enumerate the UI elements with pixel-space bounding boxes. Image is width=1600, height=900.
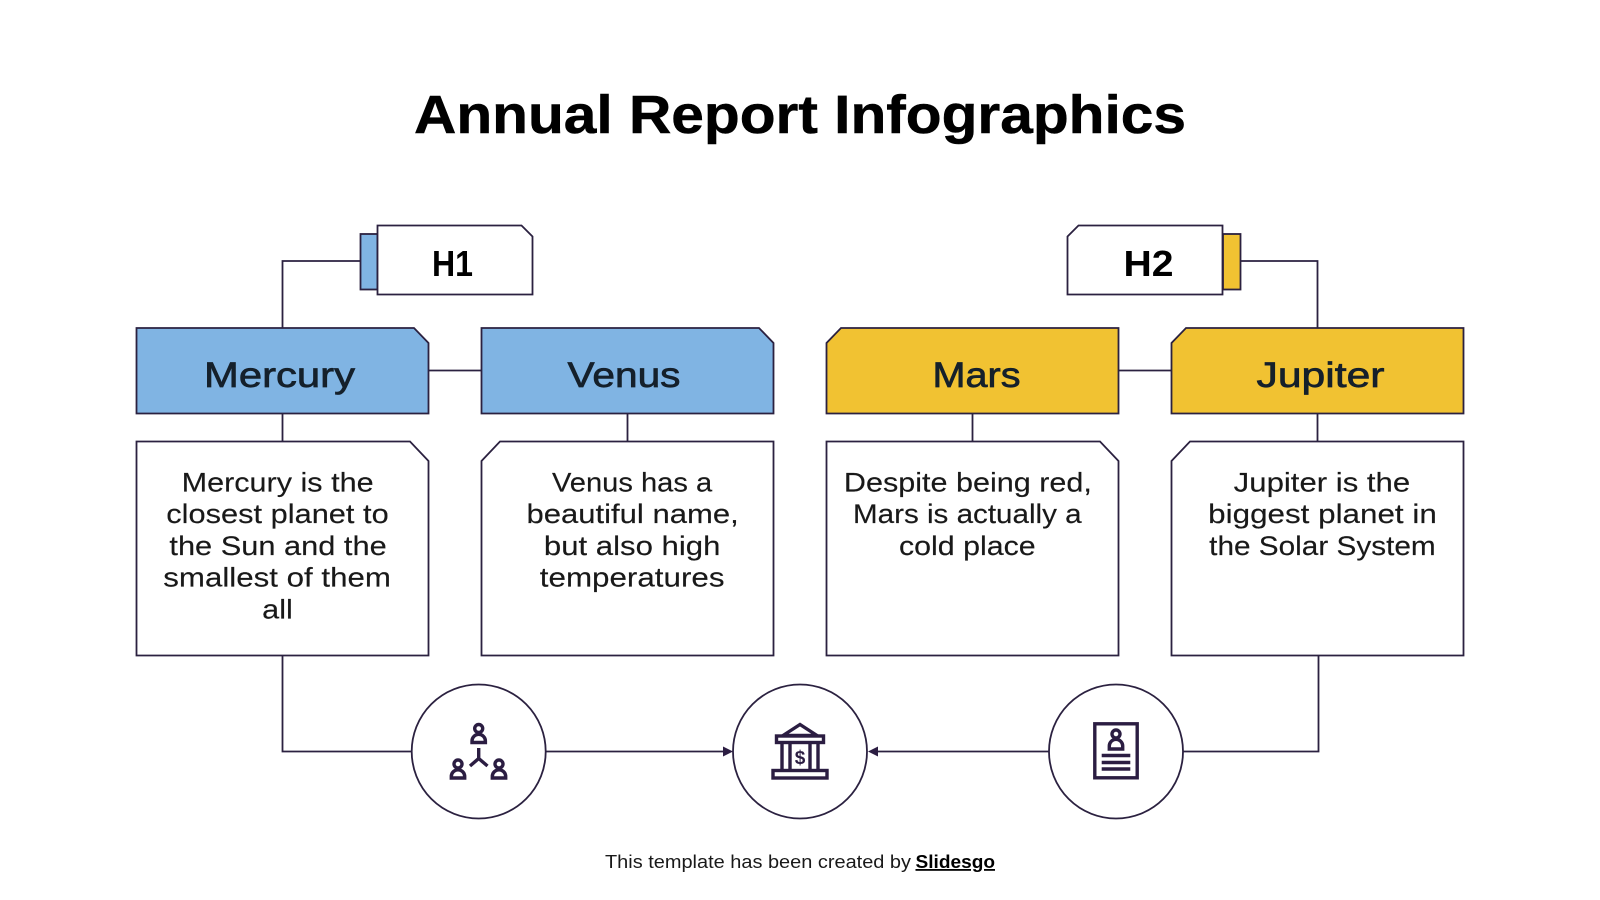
Jupiter description text: Jupiter is the: [1234, 468, 1410, 498]
Mercury name: Mercury: [204, 356, 356, 395]
Mars name: Mars: [932, 356, 1020, 395]
flow line: Jupiter to document circle: [1182, 655, 1318, 752]
arrow: network to bank: [546, 746, 733, 756]
icon: three people connected: [451, 724, 506, 778]
Mercury header: [136, 328, 428, 414]
Mars header: [826, 328, 1118, 414]
Jupiter description text: [1208, 468, 1437, 561]
Venus name: Venus: [568, 356, 680, 395]
label: H2: [1068, 226, 1240, 294]
Venus description text: Venus has a: [552, 468, 713, 498]
Venus header: [482, 328, 774, 414]
flow line: Mercury to network circle: [282, 655, 412, 752]
Mercury description text: [163, 468, 391, 624]
H2 colour tab: [1223, 234, 1240, 290]
Mercury description text: closest planet to: [166, 499, 389, 529]
footer credit: This template has been created by: [605, 852, 911, 872]
Jupiter description text: biggest planet in: [1208, 499, 1437, 529]
connector lines between labels, planets and description boxes: [282, 261, 1318, 441]
Venus description text: beautiful name,: [526, 499, 739, 529]
Jupiter name: Jupiter: [1256, 356, 1385, 395]
icon: personal document: [1095, 724, 1137, 778]
Venus description text: temperatures: [540, 563, 724, 593]
icon: bank building with dollar sign: $: [795, 748, 806, 769]
icon circle: bank: [733, 684, 867, 818]
Jupiter header: [1172, 328, 1464, 414]
Mars description text: Mars is actually a: [853, 499, 1083, 529]
Mercury description text: all: [262, 594, 293, 624]
Venus description text: but also high: [544, 531, 720, 561]
Mars description text: cold place: [899, 531, 1036, 561]
Jupiter description text: the Solar System: [1209, 531, 1436, 561]
H1 colour tab: [360, 234, 378, 290]
Mercury description text: Mercury is the: [182, 468, 374, 498]
icon circle: document: [1049, 684, 1183, 818]
icon circle: network of people: [412, 684, 546, 818]
title: Annual Report Infographics: [414, 85, 1186, 145]
arrow: document to bank: [868, 746, 1049, 756]
panel: Mars: [826, 328, 1118, 656]
Mercury description text: the Sun and the: [169, 531, 387, 561]
Mars description text: Despite being red,: [844, 468, 1092, 498]
Mercury description box: [136, 442, 428, 656]
panel: Mercury: [136, 328, 428, 656]
footer credit: Slidesgo: [916, 852, 995, 872]
H1 box: [378, 226, 532, 294]
panel: Venus: [482, 328, 774, 656]
Mercury description text: smallest of them: [163, 563, 391, 593]
H1 text: H1: [432, 243, 473, 284]
Venus description text: [526, 468, 739, 593]
Mars description box: [826, 442, 1118, 656]
Jupiter description box: [1172, 442, 1464, 656]
label: H1: [360, 226, 532, 294]
panel: Jupiter: [1172, 328, 1464, 656]
Mars description text: [844, 468, 1092, 561]
Venus description box: [482, 442, 774, 656]
H2 box: [1068, 226, 1222, 294]
H2 text: H2: [1124, 243, 1174, 284]
